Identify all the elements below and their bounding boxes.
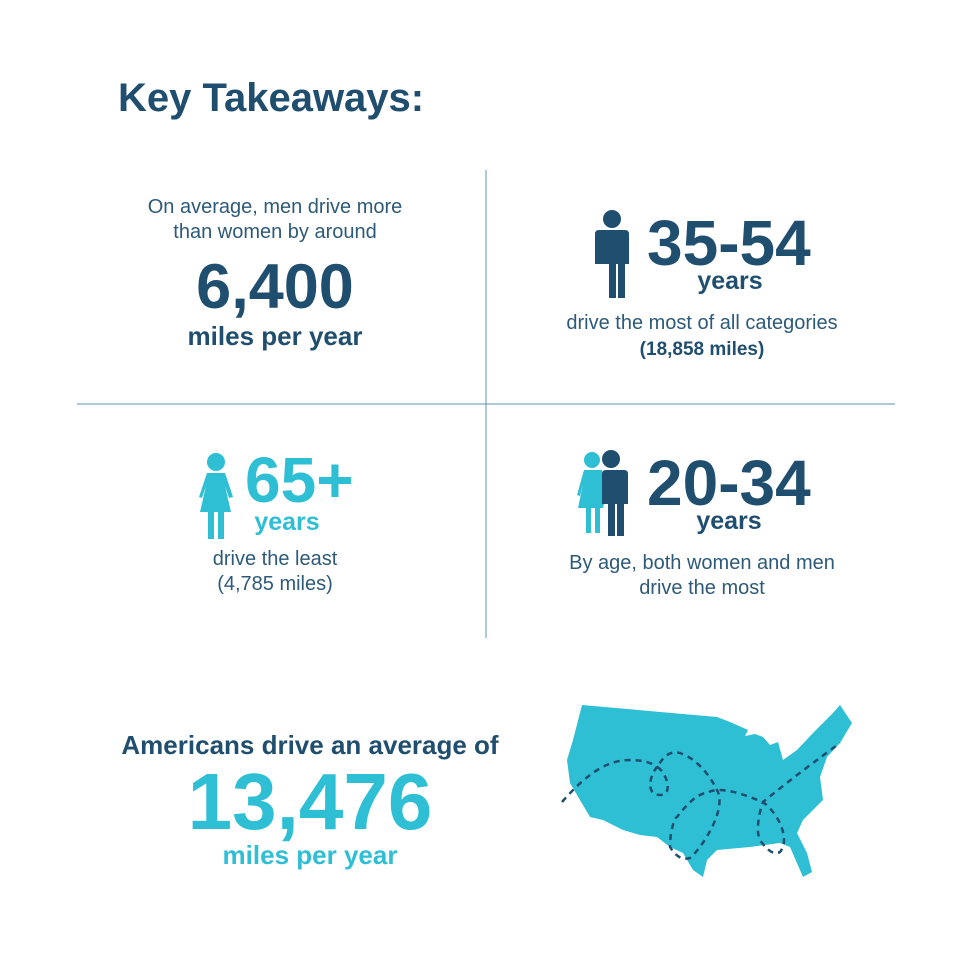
icon: man: [595, 210, 629, 298]
miles: (18,858 miles): [640, 339, 764, 360]
description: drive the least: [213, 548, 337, 570]
intro text: On average, men drive more: [148, 196, 402, 218]
panel: 65+: [199, 444, 354, 595]
big number 6,400: 6,400: [196, 252, 354, 322]
description: drive the most of all categories: [566, 312, 838, 334]
intro text: [148, 196, 402, 243]
title: Key Takeaways:: [118, 76, 424, 120]
miles per year: miles per year: [223, 840, 397, 870]
miles per year: miles per year: [188, 321, 362, 351]
years: years: [254, 508, 320, 536]
description: By age, both women and men: [569, 552, 835, 574]
icon: woman: [199, 453, 233, 539]
big number 20-34: 20-34: [647, 447, 811, 519]
panel: 35-54: [566, 207, 838, 360]
intro text: than women by around: [173, 221, 377, 243]
description: drive the most: [639, 577, 765, 599]
years: years: [696, 507, 762, 535]
years: years: [697, 267, 763, 295]
description: [569, 552, 835, 599]
heading: Americans drive an average of: [121, 730, 499, 760]
icon: couple: [577, 450, 628, 536]
panel: 20-34: [569, 447, 835, 599]
panel: men vs women: [148, 196, 402, 351]
panel: americans average: [121, 730, 499, 870]
description: (4,785 miles): [217, 573, 333, 595]
big number 65+: 65+: [245, 444, 354, 516]
big number 13,476: 13,476: [188, 757, 432, 846]
description: [213, 548, 338, 595]
big number 35-54: 35-54: [647, 207, 811, 279]
